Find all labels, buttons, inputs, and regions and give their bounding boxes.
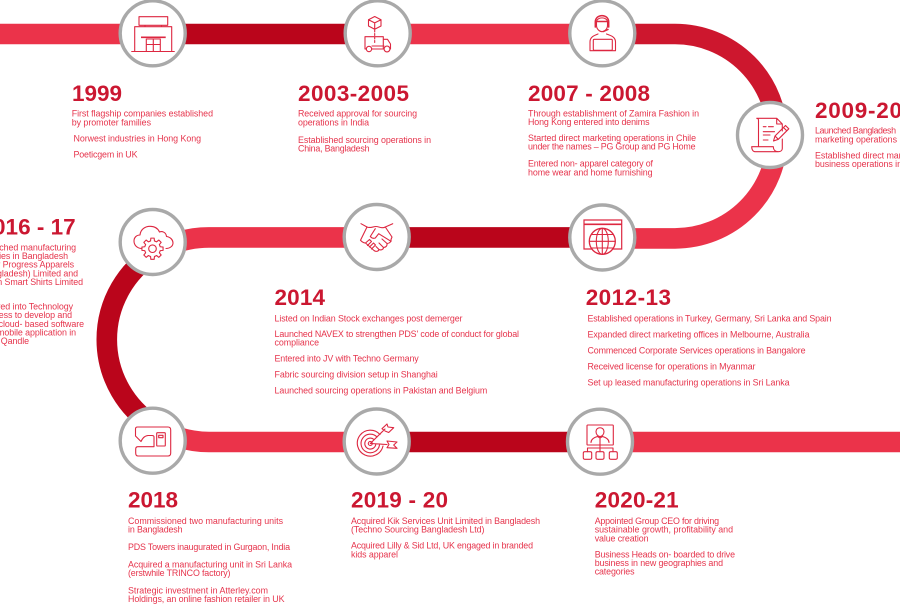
text: 2003-2005 details: China, Bangladesh xyxy=(298,144,370,154)
text: 2007 - 2008 details: Through establishment of Zamira Fashion in xyxy=(528,108,699,118)
text: 2009-20 details xyxy=(815,126,900,169)
timeline track xyxy=(0,34,900,442)
text: 2019 - 20 details: Acquired Kik Services Unit Limited in Bangladesh xyxy=(351,516,540,526)
text: 2014 details: Launched NAVEX to strengthen PDS' code of conduct for global xyxy=(274,329,519,339)
heading: 2018: 2018 xyxy=(128,488,178,513)
heading: 2012-13: 2012-13 xyxy=(586,285,671,310)
text: 2020-21 details: Appointed Group CEO for driving xyxy=(595,516,719,526)
text: 1999 details: Norwest industries in Hong Kong xyxy=(74,134,201,144)
text: 2014 details: Listed on Indian Stock exchanges post demerger xyxy=(274,313,463,323)
icon: box and truck xyxy=(345,1,410,66)
text: 2019 - 20 details: (Techno Sourcing Bangladesh Ltd) xyxy=(351,525,485,535)
text: 2012-13 details: Commenced Corporate Services operations in Bangalore xyxy=(588,345,806,355)
text: 2020-21 details: Business Heads on- boarded to drive xyxy=(595,549,735,559)
text: 2012-13 details: Expanded direct marketing offices in Melbourne, Australia xyxy=(588,329,810,339)
text: 2020-21 details: value creation xyxy=(595,533,649,543)
text: 2007 - 2008 details xyxy=(528,108,699,178)
heading: 2007 - 2008: 2007 - 2008 xyxy=(528,81,650,106)
text: 2018 details xyxy=(128,516,292,604)
text: 2007 - 2008 details: Started direct marketing operations in Chile xyxy=(528,133,696,143)
text: 2020-21 details: categories xyxy=(595,567,635,577)
milestone: 2003-2005 xyxy=(298,1,431,153)
text: 1999 details: Poeticgem in UK xyxy=(74,150,138,160)
milestone: 2014 xyxy=(274,204,519,396)
milestone: 2019 - 20 xyxy=(344,409,540,559)
text: 2014 details: compliance xyxy=(274,338,319,348)
text: 2007 - 2008 details: Hong Kong entered into denims xyxy=(528,117,650,127)
text: 2014 details: Entered into JV with Techno Germany xyxy=(274,354,419,364)
text: 2003-2005 details: Received approval for sourcing xyxy=(298,109,417,119)
icon: handshake xyxy=(344,204,409,270)
milestone: 2020-21 xyxy=(568,409,735,577)
text: 2012-13 details: Established operations in Turkey, Germany, Sri Lanka and Spain xyxy=(588,313,832,323)
milestone: 2018 xyxy=(120,408,292,604)
text: 2014 details xyxy=(274,313,519,396)
text: 2012-13 details: Set up leased manufacturing operations in Sri Lanka xyxy=(588,377,790,387)
text: 2018 details: Commissioned two manufacturing units xyxy=(128,516,284,526)
text: 2018 details: (erstwhile TRINCO factory) xyxy=(128,568,231,578)
icon: target with arrows xyxy=(344,409,409,474)
text: 2018 details: in Bangladesh xyxy=(128,525,183,535)
text: 1999 details: First flagship companies established xyxy=(72,109,213,119)
text: 2018 details: PDS Towers inaugurated in Gurgaon, India xyxy=(128,542,290,552)
text: 2018 details: Holdings, an online fashion retailer in UK xyxy=(128,594,285,604)
heading: 1999: 1999 xyxy=(72,81,122,106)
text: 2020-21 details xyxy=(595,516,735,577)
text: 2007 - 2008 details: Entered non- apparel category of xyxy=(528,159,654,169)
heading: 2020-21: 2020-21 xyxy=(595,488,679,513)
text: 2019 - 20 details xyxy=(351,516,540,559)
text: 2003-2005 details: operations in India xyxy=(298,118,369,128)
icon: document and pen xyxy=(738,102,802,168)
text: 2009-20 details: Launched Bangladesh xyxy=(815,126,896,136)
text: 2012-13 details xyxy=(588,313,832,387)
text: 2014 details: Launched sourcing operations in Pakistan and Belgium xyxy=(274,386,487,396)
icon: cloud and gear xyxy=(120,210,185,274)
heading: 2019 - 20: 2019 - 20 xyxy=(351,488,448,513)
milestone: 2009-20 xyxy=(738,98,900,169)
heading: 2014: 2014 xyxy=(274,285,325,310)
text: 2014 details: Fabric sourcing division setup in Shanghai xyxy=(274,370,438,380)
text: 2009-20 details: marketing operations xyxy=(815,134,898,144)
heading: 2009-20: 2009-20 xyxy=(815,98,900,123)
text: 1999 details xyxy=(72,109,213,160)
text: 1999 details: by promoter families xyxy=(72,118,152,128)
text: 2003-2005 details: Established sourcing operations in xyxy=(298,135,431,145)
text: 2007 - 2008 details: under the names – PG Group and PG Home xyxy=(528,142,696,152)
text: 2019 - 20 details: Acquired Lilly & Sid Ltd, UK engaged in branded xyxy=(351,541,533,551)
icon: browser window with globe xyxy=(570,205,635,270)
text: 2007 - 2008 details: home wear and home furnishing xyxy=(528,168,653,178)
text: 2003-2005 details xyxy=(298,109,431,154)
text: 2020-21 details: sustainable growth, profitability and xyxy=(595,525,733,535)
text: 2012-13 details: Received license for operations in Myanmar xyxy=(588,361,756,371)
text: 2020-21 details: business in new geographies and xyxy=(595,558,723,568)
milestone: 1999 xyxy=(72,1,213,159)
icon: sewing machine xyxy=(120,408,185,473)
text: 2018 details: Acquired a manufacturing unit in Sri Lanka xyxy=(128,559,292,569)
icon: support agent with laptop xyxy=(570,1,635,66)
milestone: 2012-13 xyxy=(570,205,832,387)
heading: 2003-2005: 2003-2005 xyxy=(298,81,409,106)
milestone: 2007 - 2008 xyxy=(528,1,699,177)
text: 2018 details: Strategic investment in Atterley.com xyxy=(128,585,268,595)
text: 2009-20 details: business operations in xyxy=(815,159,900,169)
icon: storefront xyxy=(120,1,185,66)
text: 2019 - 20 details: kids apparel xyxy=(351,549,398,559)
milestone: 2016 - 17 xyxy=(0,210,185,346)
text: 2016 - 17 details xyxy=(0,242,84,346)
icon: presenter on screen with org chart xyxy=(568,409,632,474)
